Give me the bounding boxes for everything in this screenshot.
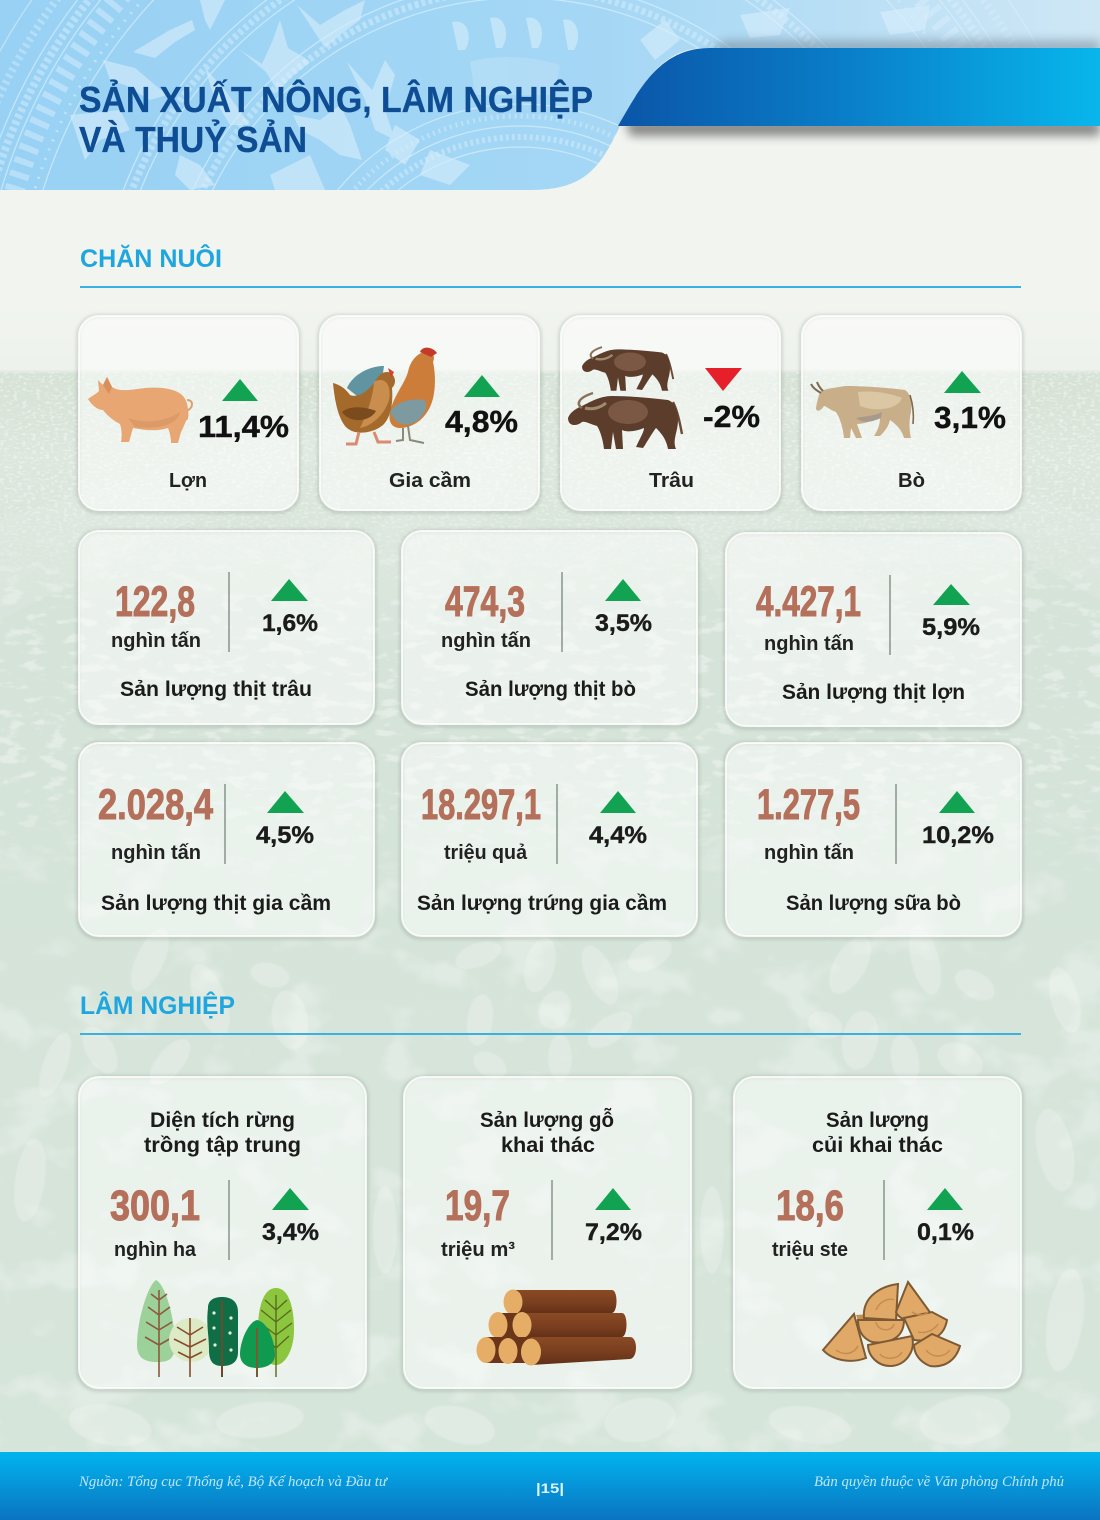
icon: up arrow: [272, 1188, 309, 1210]
card title: củi khai thác: [812, 1134, 943, 1157]
icon: up arrow: [222, 379, 258, 401]
icon: firewood: [823, 1282, 960, 1366]
unit: nghìn ha: [114, 1239, 197, 1261]
value: 19,7: [445, 1182, 510, 1230]
percent: 4,4%: [589, 822, 647, 849]
card: Gia cầm: [320, 316, 539, 510]
value: 474,3: [445, 578, 525, 626]
icon: trees: [137, 1280, 294, 1377]
label: Bò: [898, 470, 925, 492]
icon: chickens: [333, 348, 437, 444]
card: Sản lượng trứng gia cầm: [402, 743, 697, 936]
card: Sản lượng sữa bò: [726, 743, 1021, 936]
card: Sản lượng thịt lợn: [726, 533, 1021, 726]
copyright note: Bản quyền thuộc về Văn phòng Chính phủ: [814, 1474, 1064, 1490]
value: 1.277,5: [757, 781, 860, 829]
icon: up arrow: [939, 791, 975, 813]
label: Sản lượng thịt trâu: [120, 678, 312, 701]
card: Lợn: [79, 316, 298, 510]
icon: up arrow: [595, 1188, 631, 1210]
value: 18,6: [776, 1182, 844, 1230]
percent: 7,2%: [585, 1219, 642, 1246]
footer bar: [0, 1452, 1100, 1520]
card title: Sản lượng: [826, 1109, 929, 1132]
card: Diện tích rừng trồng tập trung: [79, 1077, 366, 1388]
unit: nghìn tấn: [111, 630, 201, 652]
icon: up arrow: [944, 371, 981, 393]
icon: up arrow: [271, 579, 308, 601]
percent: 1,6%: [262, 610, 318, 637]
value: 300,1: [110, 1182, 200, 1230]
section heading: Chăn nuôi: CHĂN NUÔI: [80, 243, 222, 273]
value: -2%: [703, 399, 760, 434]
label: Trâu: [649, 470, 694, 492]
title: VÀ THUỶ SẢN: [79, 119, 307, 160]
unit: triệu ste: [772, 1239, 848, 1261]
unit: nghìn tấn: [111, 842, 201, 864]
icon: pig: [88, 377, 192, 443]
card title: khai thác: [501, 1134, 595, 1157]
title: SẢN XUẤT NÔNG, LÂM NGHIỆP: [79, 78, 593, 120]
label: Sản lượng thịt bò: [465, 678, 636, 701]
card title: [812, 1109, 943, 1157]
card shadows: [78, 316, 1022, 1390]
source note: Nguồn: Tổng cục Thống kê, Bộ Kế hoạch và Đầu tư: [78, 1474, 389, 1490]
card: Sản lượng thịt trâu: [79, 531, 374, 724]
card: Sản lượng gỗ khai thác: [404, 1077, 691, 1388]
page number: |15|: [536, 1480, 564, 1496]
label: Lợn: [169, 470, 207, 492]
percent: 5,9%: [922, 614, 980, 641]
ribbon: blue band at top right: [618, 40, 1100, 126]
card: Trâu: [561, 316, 780, 510]
label: Sản lượng sữa bò: [786, 892, 961, 915]
value: 3,1%: [934, 400, 1006, 435]
title: [79, 78, 593, 160]
label: Gia cầm: [389, 470, 471, 492]
card title: Diện tích rừng: [150, 1109, 295, 1132]
unit: triệu m³: [441, 1239, 515, 1261]
card title: trồng tập trung: [144, 1134, 301, 1157]
percent: 4,5%: [256, 822, 314, 849]
icon: up arrow: [464, 375, 500, 397]
value: 122,8: [115, 578, 195, 626]
icon: up arrow: [927, 1188, 963, 1210]
label: Sản lượng thịt lợn: [782, 681, 965, 704]
label: Sản lượng trứng gia cầm: [417, 892, 667, 915]
card: Sản lượng củi khai thác: [734, 1077, 1021, 1388]
percent: 3,4%: [262, 1219, 319, 1246]
card title: [480, 1108, 614, 1157]
icon: down arrow: [705, 368, 742, 391]
value: 18.297,1: [421, 781, 541, 829]
unit: nghìn tấn: [764, 842, 854, 864]
unit: triệu quả: [444, 842, 528, 864]
value: 4,8%: [445, 404, 518, 439]
icon: two buffalo: [568, 347, 682, 449]
value: 2.028,4: [98, 781, 213, 829]
percent: 10,2%: [922, 822, 994, 849]
card title: [144, 1109, 301, 1157]
ribbon shadow: [625, 120, 1100, 136]
percent: 3,5%: [595, 610, 652, 637]
unit: nghìn tấn: [441, 630, 531, 652]
section heading: Lâm nghiệp: LÂM NGHIỆP: [80, 990, 235, 1020]
value: 4.427,1: [756, 578, 861, 626]
value: 11,4%: [198, 409, 289, 444]
icon: up arrow: [600, 791, 636, 813]
icon: up arrow: [933, 584, 970, 605]
icon: cow: [811, 382, 913, 438]
icon: up arrow: [267, 791, 304, 813]
card: Sản lượng thịt gia cầm: [79, 743, 374, 936]
label: Sản lượng thịt gia cầm: [101, 892, 331, 915]
icon: log pile: [476, 1290, 636, 1366]
unit: nghìn tấn: [764, 633, 854, 655]
header banner with bronze drum pattern: [0, 0, 1100, 190]
percent: 0,1%: [917, 1219, 974, 1246]
card: Sản lượng thịt bò: [402, 531, 697, 724]
card title: Sản lượng gỗ: [480, 1108, 614, 1132]
icon: up arrow: [605, 579, 641, 601]
card: Bò: [802, 316, 1021, 510]
